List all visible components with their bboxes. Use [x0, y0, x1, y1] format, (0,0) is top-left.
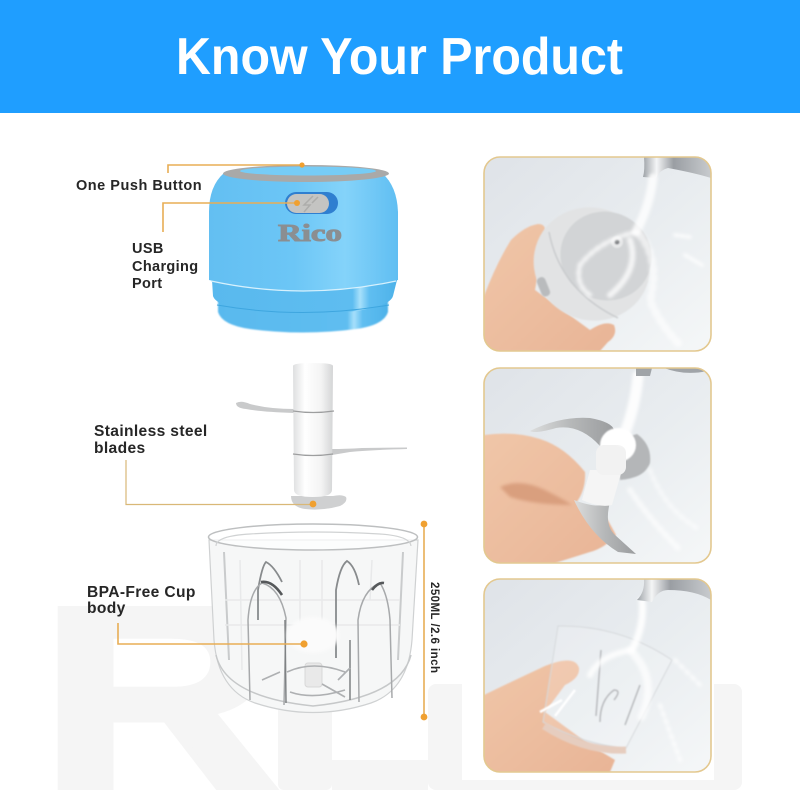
- cup body: [209, 540, 418, 712]
- panel: rinsing the blades: [484, 368, 711, 563]
- lower blade: [574, 500, 636, 554]
- watermark blocks: [278, 684, 742, 790]
- blurred inner haze: [287, 617, 339, 653]
- label: USB: [132, 241, 164, 257]
- callout: USB charging port: [132, 200, 300, 292]
- dimension marker: [421, 521, 440, 720]
- label: body: [87, 600, 126, 617]
- base blade: [291, 495, 346, 510]
- centre spindle: [305, 663, 322, 687]
- clear cup held under tap: [540, 626, 672, 750]
- front arches: [248, 583, 392, 705]
- water stream and splash: [600, 428, 636, 462]
- rim: [208, 524, 418, 550]
- shaft: [293, 363, 333, 497]
- panel border: [484, 157, 711, 351]
- product: blade assembly: [236, 363, 407, 510]
- white shaft: [582, 470, 622, 506]
- title: Know Your Product: [176, 28, 623, 86]
- label: Port: [132, 276, 162, 292]
- lower ring: [218, 296, 388, 332]
- label: BPA-Free Cup: [87, 584, 196, 601]
- silver blade disc: [618, 434, 650, 480]
- callout: BPA-free cup body: [87, 584, 308, 648]
- water stream and splash: [579, 178, 702, 345]
- hand: [484, 224, 615, 351]
- panel: rinsing the motor lid: [484, 157, 711, 351]
- grey top rim: [223, 165, 389, 182]
- product: motor lid: [209, 165, 398, 332]
- upper blade: [530, 418, 614, 446]
- back arches: [258, 561, 359, 658]
- hand: [484, 660, 615, 772]
- panel border: [484, 579, 711, 772]
- faucet: [643, 157, 711, 178]
- callout: one push button: [76, 162, 305, 194]
- callout: stainless steel blades: [94, 423, 316, 507]
- brand logo: Rico: [278, 221, 342, 247]
- label: Stainless steel: [94, 423, 208, 440]
- hand: [484, 434, 616, 563]
- photo background: [484, 579, 711, 772]
- label: blades: [94, 440, 146, 457]
- upper blade: [236, 402, 294, 413]
- water stream and splash: [588, 600, 700, 720]
- panel: rinsing the cup: [484, 579, 711, 772]
- faucet: [636, 368, 704, 376]
- main housing: [209, 173, 398, 291]
- label: Charging: [132, 259, 198, 275]
- blue top: [240, 166, 376, 176]
- photo background: [484, 157, 711, 351]
- faucet: [637, 579, 711, 602]
- base ridges: [262, 666, 350, 697]
- lid seen from below: [533, 208, 651, 320]
- product: clear cup: [208, 524, 418, 712]
- header banner: [0, 0, 800, 113]
- collar: [212, 280, 397, 314]
- dimension label: 250ML /2.6 inch: [428, 582, 440, 673]
- photo background: [484, 368, 711, 563]
- white backing behind photo panel: [462, 684, 714, 780]
- lower blade: [332, 448, 407, 455]
- label: One Push Button: [76, 178, 202, 194]
- panel border: [484, 368, 711, 563]
- power button: [285, 192, 338, 214]
